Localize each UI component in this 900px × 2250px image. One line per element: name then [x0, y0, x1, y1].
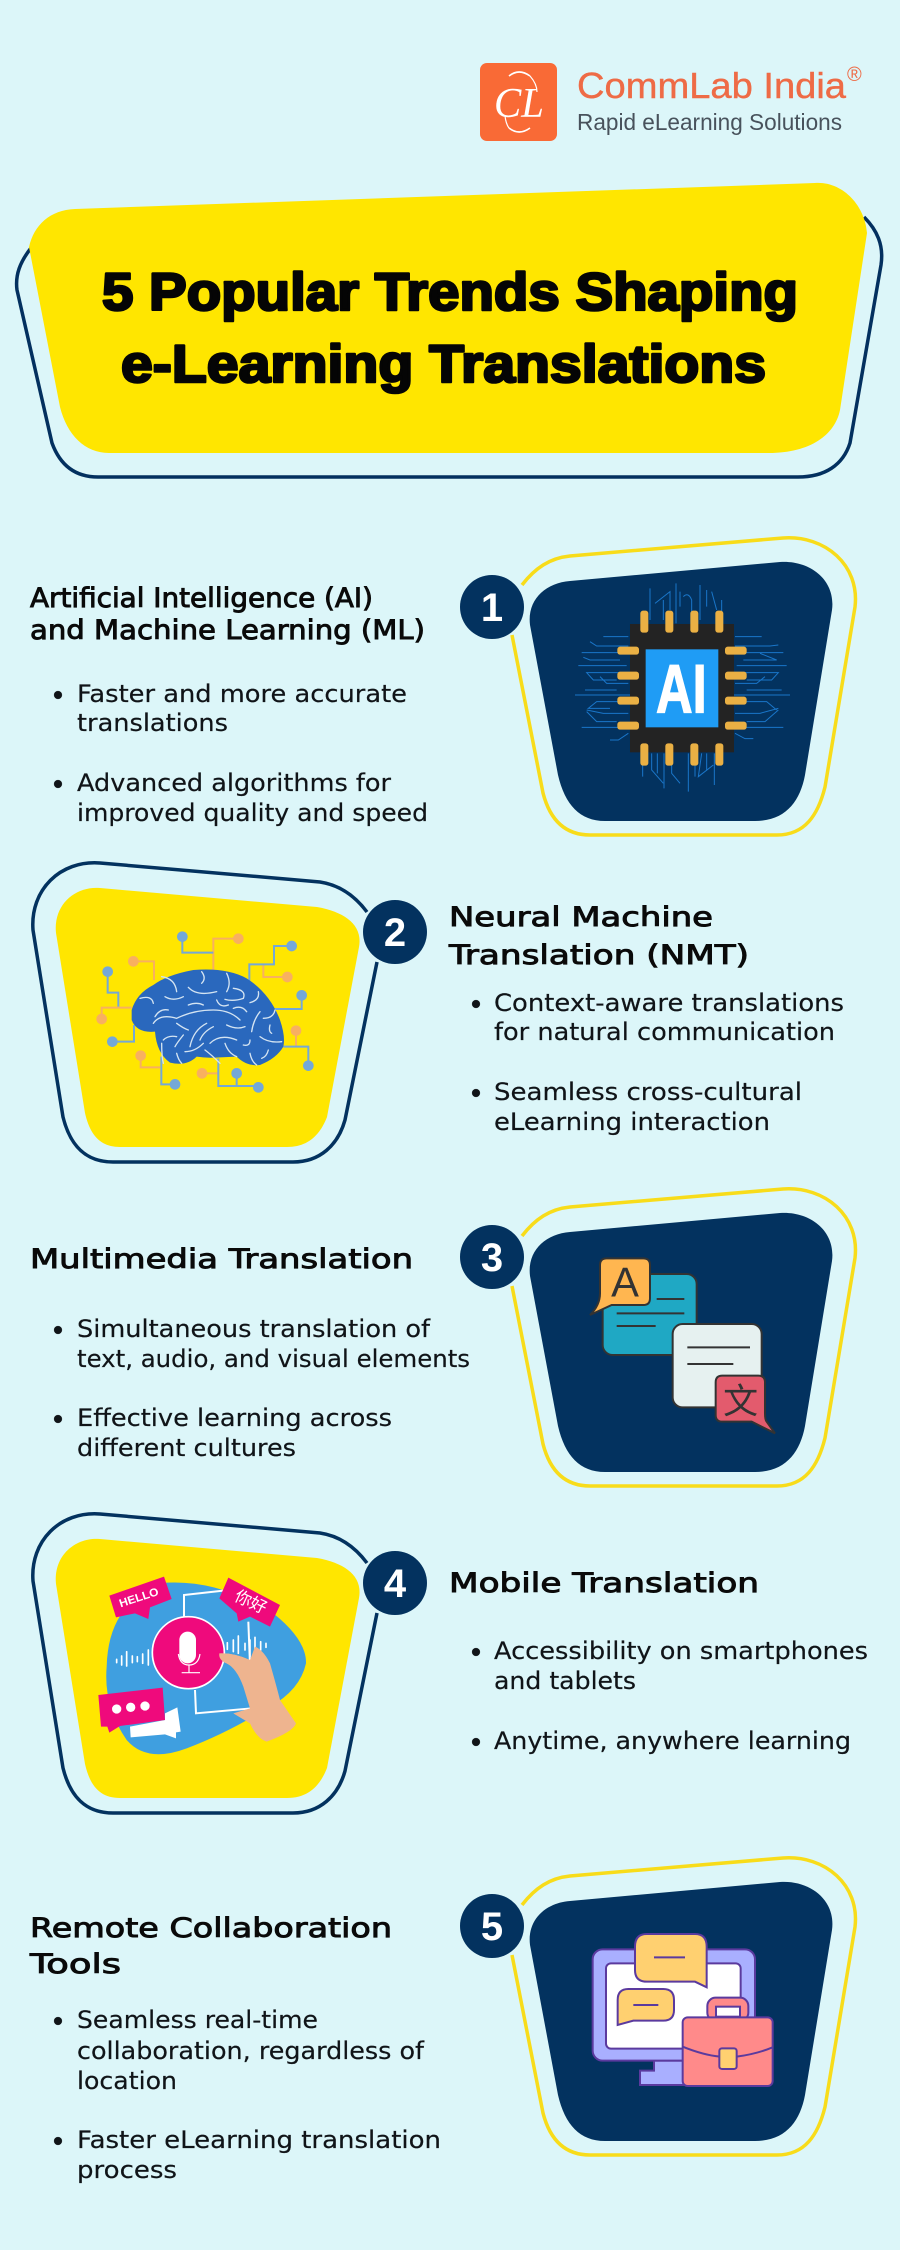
banner fill: [29, 183, 867, 453]
bullets 5: process: [77, 2156, 177, 2184]
yellow shape: [56, 888, 360, 1147]
bullets 1: [54, 680, 428, 827]
bullets 5: Seamless real-time: [77, 2006, 318, 2034]
number badge 1: [460, 575, 524, 639]
bullets 4: Accessibility on smartphones: [494, 1637, 868, 1665]
bullets 2: for natural communication: [494, 1018, 835, 1046]
outline: [33, 1514, 377, 1813]
navy shape: [530, 562, 832, 821]
icon: brain with circuits: [96, 931, 314, 1093]
bullets 3: Effective learning across: [77, 1404, 392, 1432]
navy shape: [530, 1213, 832, 1472]
title: [102, 263, 798, 394]
icon: CL logo mark: [480, 63, 557, 141]
heading 5: Tools: [29, 1949, 121, 1980]
number badge 3: [460, 1225, 524, 1289]
heading 2: Neural Machine: [449, 902, 713, 933]
outline: [33, 863, 377, 1162]
icon: monitor, chat and briefcase: [593, 1934, 773, 2086]
heading 2: Translation (NMT): [448, 940, 749, 971]
number badge 5: 5: [481, 1905, 503, 1949]
bullets 3: [54, 1315, 470, 1462]
panel: trend 2 text: [448, 902, 844, 1136]
number badge 4: 4: [384, 1562, 407, 1606]
banner outline: [17, 217, 882, 477]
panel: trend 5 text: [29, 1913, 441, 2184]
number badge 4: [363, 1551, 427, 1615]
icon: voice translation on phone: [98, 1577, 306, 1754]
bullets 3: text, audio, and visual elements: [77, 1345, 470, 1373]
bullets 2: Context-aware translations: [494, 989, 844, 1017]
heading 1: and Machine Learning (ML): [30, 615, 425, 646]
icon: voice translation on phone: HELLO: [118, 1586, 160, 1610]
title: 5 Popular Trends Shaping: [102, 263, 798, 322]
bullets 3: Simultaneous translation of: [77, 1315, 431, 1343]
bullets 2: [472, 989, 844, 1136]
panel: trend 4 image: [33, 1514, 427, 1813]
number badge 2: 2: [384, 911, 406, 955]
number badge 2: [363, 900, 427, 964]
bullets 5: [54, 2006, 441, 2184]
heading 2: [448, 902, 749, 971]
panel: trend 3 text: [30, 1244, 470, 1462]
outline: [512, 1189, 855, 1486]
icon: translation bubbles: 文: [723, 1373, 758, 1424]
panel: trend 2 image: [33, 863, 427, 1162]
yellow shape: [56, 1539, 360, 1798]
number badge 3: 3: [481, 1236, 503, 1280]
heading 1: [30, 583, 425, 646]
bullets 4: [472, 1637, 868, 1755]
bullets 5: location: [77, 2067, 177, 2095]
heading 3: Multimedia Translation: [30, 1244, 413, 1275]
number badge 5: [460, 1894, 524, 1958]
panel: trend 3 image: [460, 1189, 855, 1486]
title banner: [17, 183, 882, 477]
icon: translation bubbles: A: [611, 1259, 639, 1306]
bullets 5: Faster eLearning translation: [77, 2126, 441, 2154]
outline: [512, 538, 855, 835]
panel: trend 4 text: [449, 1568, 868, 1755]
bullets 4: Anytime, anywhere learning: [494, 1727, 851, 1755]
logo: CommLab India: [480, 63, 862, 141]
heading 1: Artificial Intelligence (AI): [30, 583, 373, 614]
bullets 1: improved quality and speed: [77, 799, 428, 827]
bullets 3: different cultures: [77, 1434, 296, 1462]
bullets 1: translations: [77, 709, 228, 737]
icon: CL logo mark: CL: [494, 81, 544, 127]
heading 5: [29, 1913, 392, 1980]
registered mark: ®: [847, 64, 862, 86]
title: e-Learning Translations: [121, 335, 766, 394]
number badge 1: 1: [481, 586, 503, 630]
tagline: Rapid eLearning Solutions: [577, 109, 842, 135]
icon: AI chip: AI: [656, 652, 707, 728]
panel: trend 1 text: [30, 583, 428, 827]
navy shape: [530, 1882, 832, 2141]
heading 4: Mobile Translation: [449, 1568, 759, 1599]
bullets 2: Seamless cross-cultural: [494, 1078, 802, 1106]
bullets 2: eLearning interaction: [494, 1108, 770, 1136]
bullets 5: collaboration, regardless of: [77, 2037, 425, 2065]
brand name: CommLab India: [577, 65, 847, 106]
icon: AI chip: [575, 583, 790, 792]
outline: [512, 1858, 855, 2155]
bullets 1: Advanced algorithms for: [77, 769, 391, 797]
panel: trend 1 image: [460, 538, 855, 835]
icon: voice translation on phone: 你好: [231, 1583, 272, 1619]
icon: translation bubbles: [590, 1258, 775, 1433]
panel: trend 5 image: [460, 1858, 855, 2155]
bullets 4: and tablets: [494, 1667, 636, 1695]
heading 5: Remote Collaboration: [30, 1913, 392, 1944]
bullets 1: Faster and more accurate: [77, 680, 407, 708]
